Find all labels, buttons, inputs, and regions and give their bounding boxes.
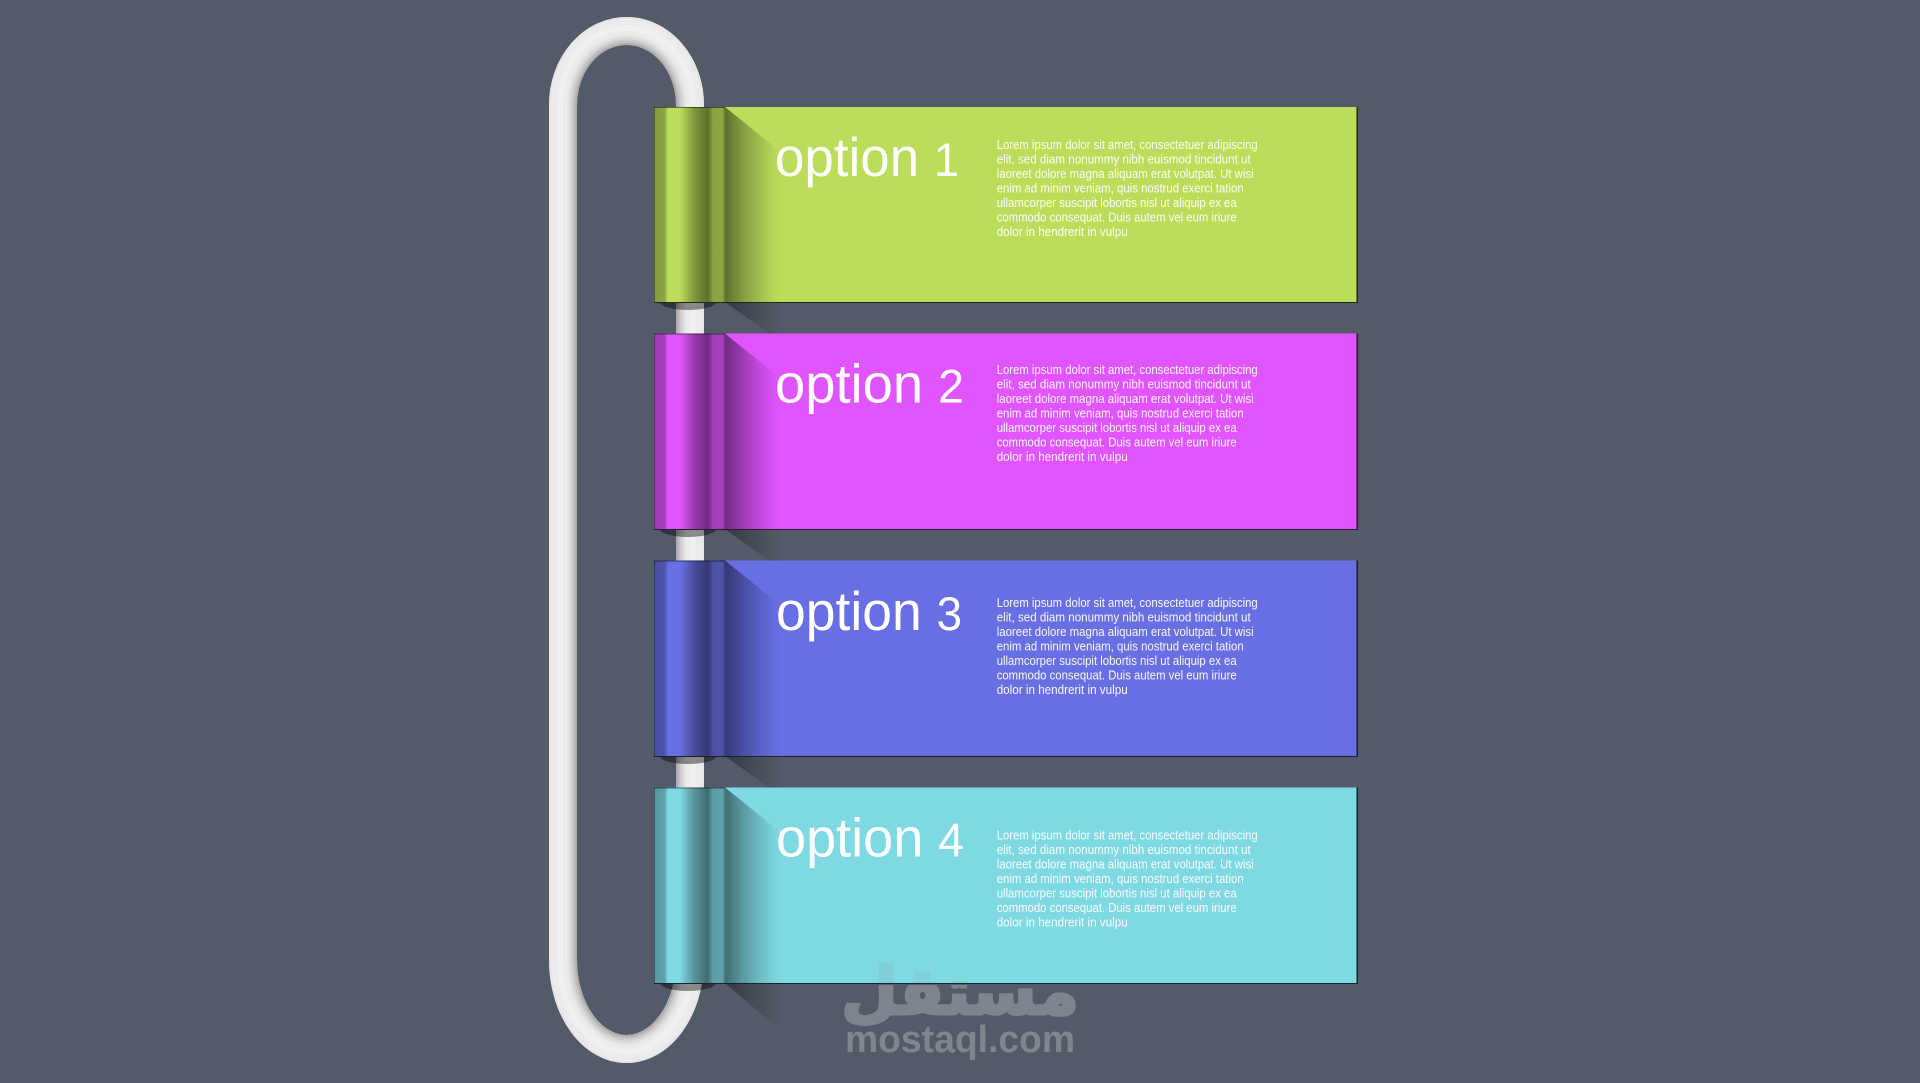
fold shadow xyxy=(725,788,782,983)
panel: option 1 xyxy=(654,107,1358,303)
fold shadow xyxy=(725,107,782,302)
body text: enim ad minim veniam, quis nostrud exerci tation xyxy=(997,406,1244,420)
body text: enim ad minim veniam, quis nostrud exerci tation xyxy=(997,182,1244,196)
body text: commodo consequat. Duis autem vel eum iriure xyxy=(997,436,1237,450)
heading: option 4 xyxy=(776,806,964,868)
body text: enim ad minim veniam, quis nostrud exerci tation xyxy=(997,872,1244,886)
body text: commodo consequat. Duis autem vel eum iriure xyxy=(997,901,1237,915)
ribbon fold xyxy=(654,334,725,529)
panel: option 2 xyxy=(654,334,1358,530)
body text: elit, sed diam nonummy nibh euismod tincidunt ut xyxy=(997,152,1251,166)
body text: Lorem ipsum dolor sit amet, consectetuer adipiscing xyxy=(997,596,1258,610)
body text: elit, sed diam nonummy nibh euismod tincidunt ut xyxy=(997,843,1251,857)
body text: Lorem ipsum dolor sit amet, consectetuer adipiscing xyxy=(997,138,1258,152)
panel: option 4 xyxy=(654,788,1358,984)
body text: Lorem ipsum dolor sit amet, consectetuer adipiscing xyxy=(997,828,1258,842)
panel: option 3 xyxy=(654,560,1358,757)
body text: commodo consequat. Duis autem vel eum iriure xyxy=(997,668,1237,682)
body text: commodo consequat. Duis autem vel eum iriure xyxy=(997,210,1237,224)
heading: option 2 xyxy=(775,352,964,414)
cast shadows below the cards xyxy=(660,294,785,1031)
body text: laoreet dolore magna aliquam erat volutpat. Ut wisi xyxy=(997,392,1254,406)
fold shadow xyxy=(725,334,782,529)
body text: laoreet dolore magna aliquam erat volutpat. Ut wisi xyxy=(997,167,1254,181)
heading: option 3 xyxy=(776,580,962,642)
body text: dolor in hendrerit in vulpu xyxy=(997,225,1128,239)
body text: dolor in hendrerit in vulpu xyxy=(997,916,1128,930)
ribbon fold xyxy=(654,788,725,983)
body text: elit, sed diam nonummy nibh euismod tincidunt ut xyxy=(997,610,1251,624)
body text: dolor in hendrerit in vulpu xyxy=(997,450,1128,464)
body text: dolor in hendrerit in vulpu xyxy=(997,683,1128,697)
heading: option 1 xyxy=(775,126,959,188)
body text: ullamcorper suscipit lobortis nisl ut aliquip ex ea xyxy=(997,654,1237,668)
body text: Lorem ipsum dolor sit amet, consectetuer adipiscing xyxy=(997,363,1258,377)
body text: enim ad minim veniam, quis nostrud exerci tation xyxy=(997,640,1244,654)
watermark Latin wordmark: mostaql.com xyxy=(845,1019,1075,1061)
watermark Arabic logotype over the background: مستقل xyxy=(841,955,1079,1030)
ribbon fold xyxy=(654,107,725,302)
body text: elit, sed diam nonummy nibh euismod tincidunt ut xyxy=(997,378,1251,392)
fold shadow xyxy=(725,560,782,756)
body text: laoreet dolore magna aliquam erat volutpat. Ut wisi xyxy=(997,858,1254,872)
body text: ullamcorper suscipit lobortis nisl ut aliquip ex ea xyxy=(997,421,1237,435)
watermark Arabic logotype over the card: مستقل xyxy=(841,955,1079,1030)
watermark xyxy=(844,963,1076,1060)
white looping tube xyxy=(550,18,703,1062)
body text: laoreet dolore magna aliquam erat volutpat. Ut wisi xyxy=(997,625,1254,639)
ribbon fold xyxy=(654,560,725,756)
body text: ullamcorper suscipit lobortis nisl ut aliquip ex ea xyxy=(997,886,1237,900)
body text: ullamcorper suscipit lobortis nisl ut aliquip ex ea xyxy=(997,196,1237,210)
